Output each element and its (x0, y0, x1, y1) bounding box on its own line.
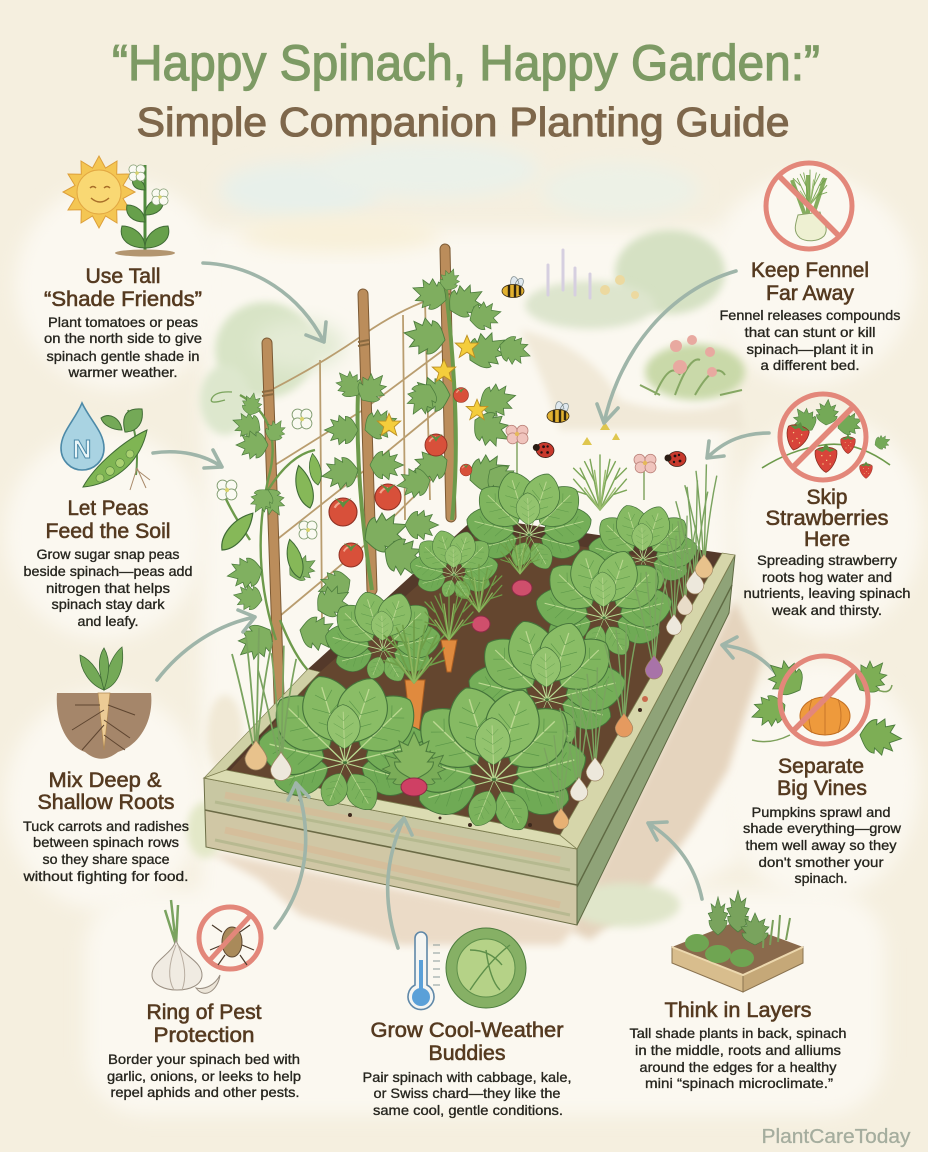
heading: Far Away (766, 281, 854, 305)
panel: keep fennel far away (720, 163, 901, 373)
title: Simple Companion Planting Guide (136, 99, 790, 145)
watermark: PlantCareToday (762, 1125, 911, 1148)
heading: Shallow Roots (38, 790, 174, 814)
text block: nitrogen that helps (46, 581, 170, 596)
text block: Fennel releases compounds (720, 308, 901, 323)
text block (743, 805, 901, 886)
text block: and leafy. (78, 614, 138, 629)
heading: Ring of Pest (146, 1000, 262, 1024)
panel: use tall shade friends (44, 156, 202, 380)
text block: garlic, onions, or leeks to help (107, 1069, 301, 1084)
text block: Grow sugar snap peas (36, 547, 180, 562)
distant garden flowers (548, 250, 742, 395)
insects (502, 277, 686, 466)
text block: Pumpkins sprawl and (752, 805, 890, 820)
heading (146, 1000, 262, 1047)
text block (107, 1052, 301, 1100)
raised bed: back soil and wood (204, 517, 735, 925)
text block: Border your spinach bed with (108, 1052, 300, 1067)
icon: thermometer and cabbage (408, 928, 526, 1010)
pea plant (211, 391, 356, 680)
text block: same cool, gentle conditions. (373, 1103, 563, 1118)
heading: Separate (778, 754, 864, 778)
text block: or Swiss chard—they like the (374, 1086, 560, 1101)
heading: Skip (806, 485, 848, 509)
text block: spinach stay dark (52, 597, 165, 612)
text block: them well away so they (746, 838, 897, 853)
heading (751, 258, 869, 305)
text block: shade everything—grow (743, 821, 901, 836)
heading (38, 768, 174, 814)
heading: Keep Fennel (751, 258, 869, 282)
panel: skip strawberries here (744, 394, 910, 618)
text block: Tall shade plants in back, spinach (630, 1026, 846, 1041)
text block: Spreading strawberry (757, 553, 897, 568)
heading: Here (804, 527, 850, 551)
text block: in the middle, roots and alliums (635, 1043, 841, 1058)
heading: Big Vines (777, 776, 867, 800)
heading: Feed the Soil (46, 519, 170, 543)
text block (744, 553, 910, 618)
heading: Grow Cool-Weather (370, 1018, 564, 1042)
arrows (153, 263, 775, 948)
heading (46, 496, 170, 543)
text block: so they share space (42, 852, 170, 867)
text block: a different bed. (760, 358, 860, 373)
heading (777, 754, 867, 800)
ground stains around bed (187, 600, 762, 945)
panel: let peas feed the soil (24, 403, 192, 629)
text block: Tuck carrots and radishes (23, 819, 189, 834)
text block (22, 819, 189, 884)
icon: strawberries with no sign (762, 394, 892, 480)
text block: nutrients, leaving spinach (744, 586, 910, 601)
text block: spinach. (794, 871, 848, 886)
heading: Think in Layers (664, 998, 812, 1022)
heading: Protection (154, 1023, 254, 1047)
text block: without fighting for food. (22, 869, 188, 884)
text block: spinach—plant it in (746, 342, 874, 357)
text block: weak and thirsty. (771, 603, 882, 618)
front vegetables (253, 620, 592, 837)
text block: beside spinach—peas add (24, 564, 192, 579)
heading: Strawberries (766, 506, 888, 530)
text block: Pair spinach with cabbage, kale, (362, 1070, 572, 1085)
panel: separate big vines (743, 652, 903, 886)
text block (720, 308, 901, 373)
trellis (262, 249, 451, 725)
text block: repel aphids and other pests. (110, 1085, 300, 1100)
panel: mix deep and shallow roots (22, 647, 189, 884)
heading (370, 1018, 564, 1065)
icon: nitrogen drop and pea pod (61, 403, 150, 490)
heading: Mix Deep & (48, 768, 162, 792)
heading: Use Tall (86, 264, 160, 288)
heading: “Shade Friends” (44, 287, 202, 311)
icon: nitrogen drop and pea pod: N (73, 434, 91, 464)
title: “Happy Spinach, Happy Garden:” (112, 35, 820, 91)
heading (766, 485, 888, 551)
icon: root cross-section (57, 647, 151, 759)
text block: spinach gentle shade in (46, 349, 200, 364)
text block: between spinach rows (33, 835, 179, 850)
back spinach rows (322, 467, 701, 749)
text block (24, 547, 192, 629)
heading: Let Peas (68, 496, 148, 520)
text block (44, 315, 202, 380)
panel: grow cool-weather buddies (362, 928, 572, 1118)
background pollinator plants (506, 422, 656, 510)
text block: mini “spinach microclimate.” (645, 1076, 834, 1091)
onions and garlic along the bed edge (232, 464, 717, 829)
panel: ring of pest protection (107, 900, 301, 1100)
text block: around the edges for a healthy (640, 1060, 837, 1075)
icon: small raised bed (672, 890, 803, 992)
text block (630, 1026, 846, 1091)
text block: Plant tomatoes or peas (48, 315, 198, 330)
tomato plants (313, 266, 535, 605)
text block: warmer weather. (67, 365, 178, 380)
text block: that can stunt or kill (744, 325, 876, 340)
title (112, 35, 820, 145)
text block: on the north side to give (44, 331, 202, 346)
text block: don't smother your (758, 855, 884, 870)
text block: roots hog water and (762, 570, 892, 585)
icon: sun and plant (63, 156, 175, 256)
icon: garlic and no-pest sign (152, 900, 261, 993)
heading (44, 264, 202, 311)
text block (362, 1070, 572, 1118)
icon: pumpkin with no sign (747, 652, 903, 757)
icon: fennel with no sign (766, 163, 852, 249)
panel: think in layers (630, 890, 846, 1091)
heading: Buddies (428, 1041, 506, 1065)
